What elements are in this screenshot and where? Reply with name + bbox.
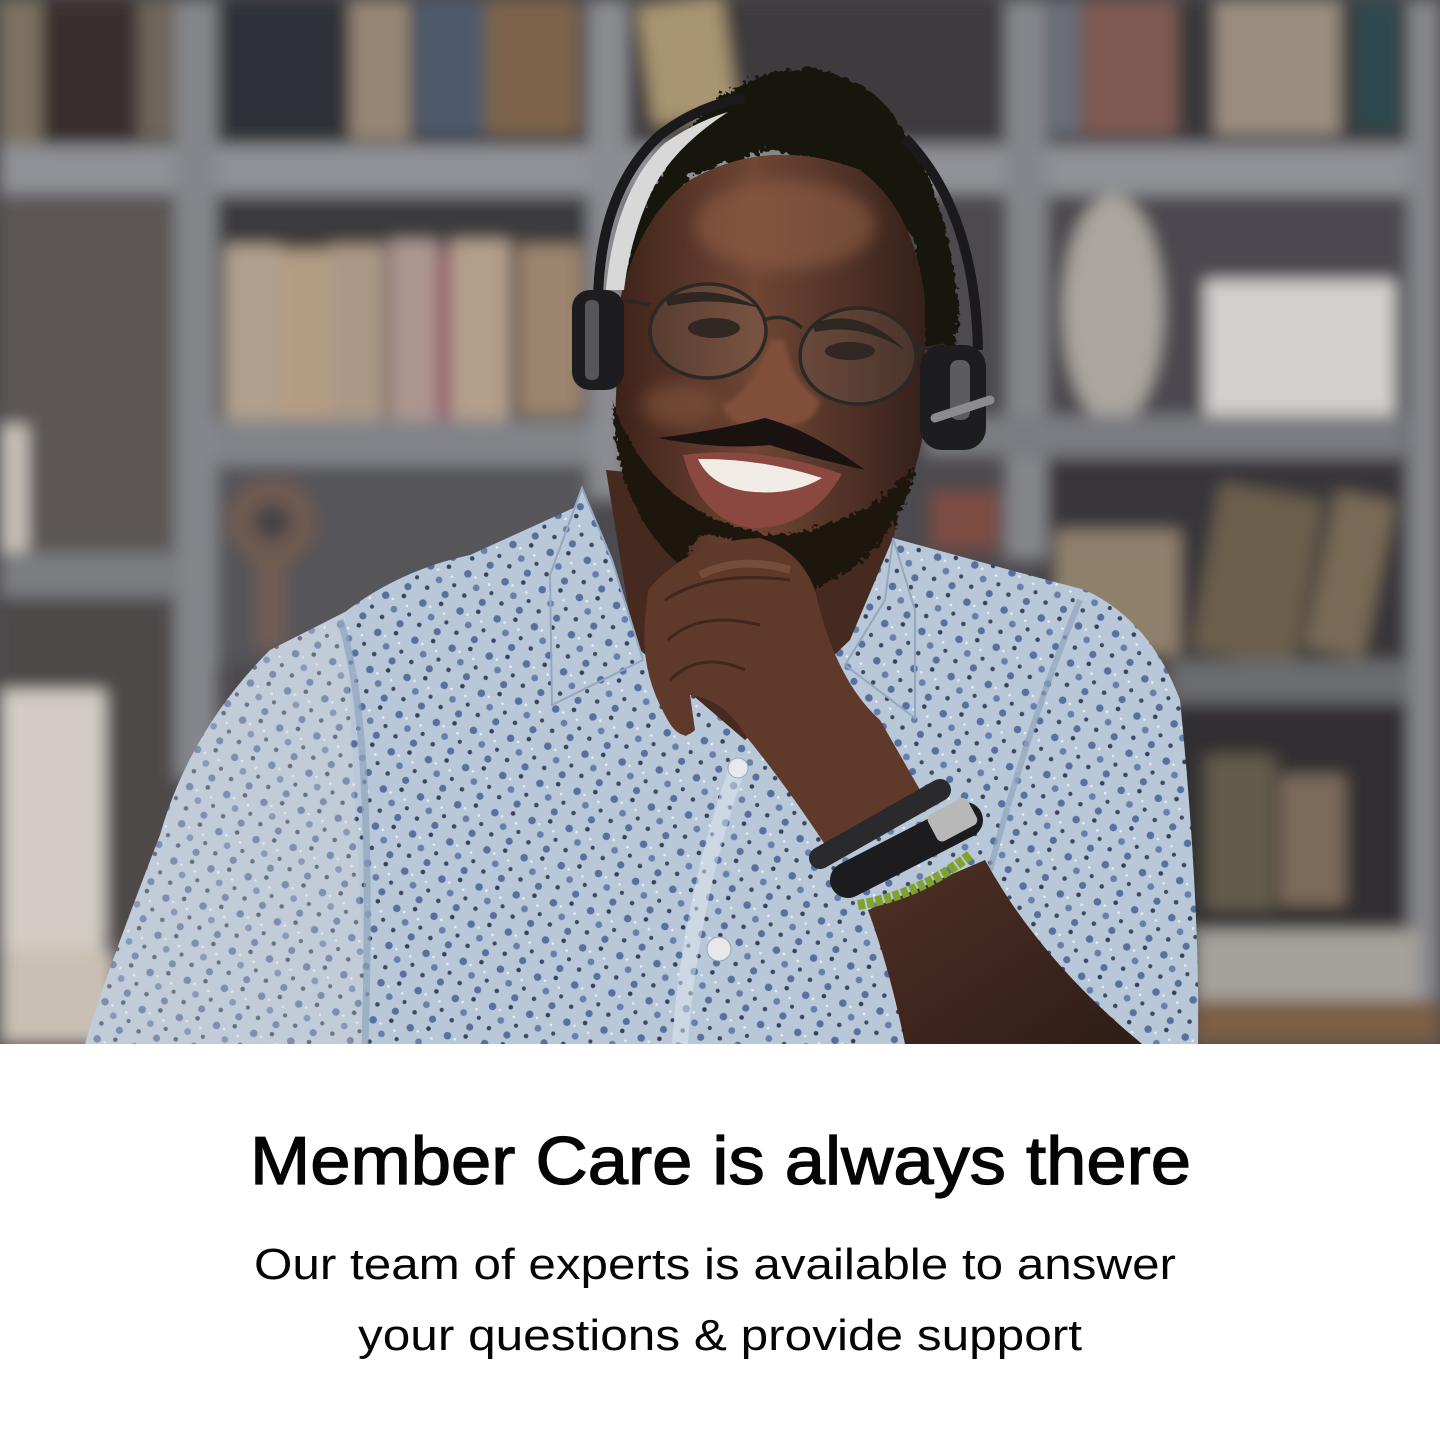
- cheek highlight: [642, 383, 718, 427]
- glasses: [625, 284, 945, 404]
- person: [85, 68, 1198, 1044]
- shirt: [85, 488, 1198, 1044]
- buttons: [707, 937, 731, 961]
- body text: [254, 1240, 1176, 1360]
- hand on chin: [644, 538, 920, 860]
- forehead highlight: [695, 180, 875, 270]
- background: blurred bookshelves: [0, 0, 1440, 1044]
- nose: [722, 340, 820, 426]
- mouth: [683, 452, 842, 528]
- lower items: [0, 425, 28, 580]
- eyes: [688, 318, 740, 338]
- beard: [612, 400, 915, 592]
- wristbands: [820, 790, 979, 905]
- hair: [622, 68, 958, 350]
- teeth: [698, 459, 822, 492]
- eyebrows: [665, 292, 760, 308]
- body text: your questions & provide support: [358, 1311, 1082, 1360]
- photo: support agent wearing a headset in front of bookshelves: [0, 0, 1440, 1044]
- collar left: [550, 488, 643, 705]
- neck: [606, 470, 900, 745]
- heading: Member Care is always there: [250, 1123, 1191, 1199]
- forearm: [868, 860, 1142, 1044]
- shelf frame: [0, 145, 1425, 195]
- moustache: [658, 418, 865, 470]
- books top row: [0, 0, 42, 145]
- face: [612, 155, 925, 592]
- white caption panel: [0, 1044, 1440, 1440]
- vase and box: [1063, 195, 1163, 425]
- body text: Our team of experts is available to answer: [254, 1240, 1176, 1289]
- books middle row: [225, 245, 280, 420]
- collar right: [845, 538, 915, 718]
- headset: [572, 98, 990, 450]
